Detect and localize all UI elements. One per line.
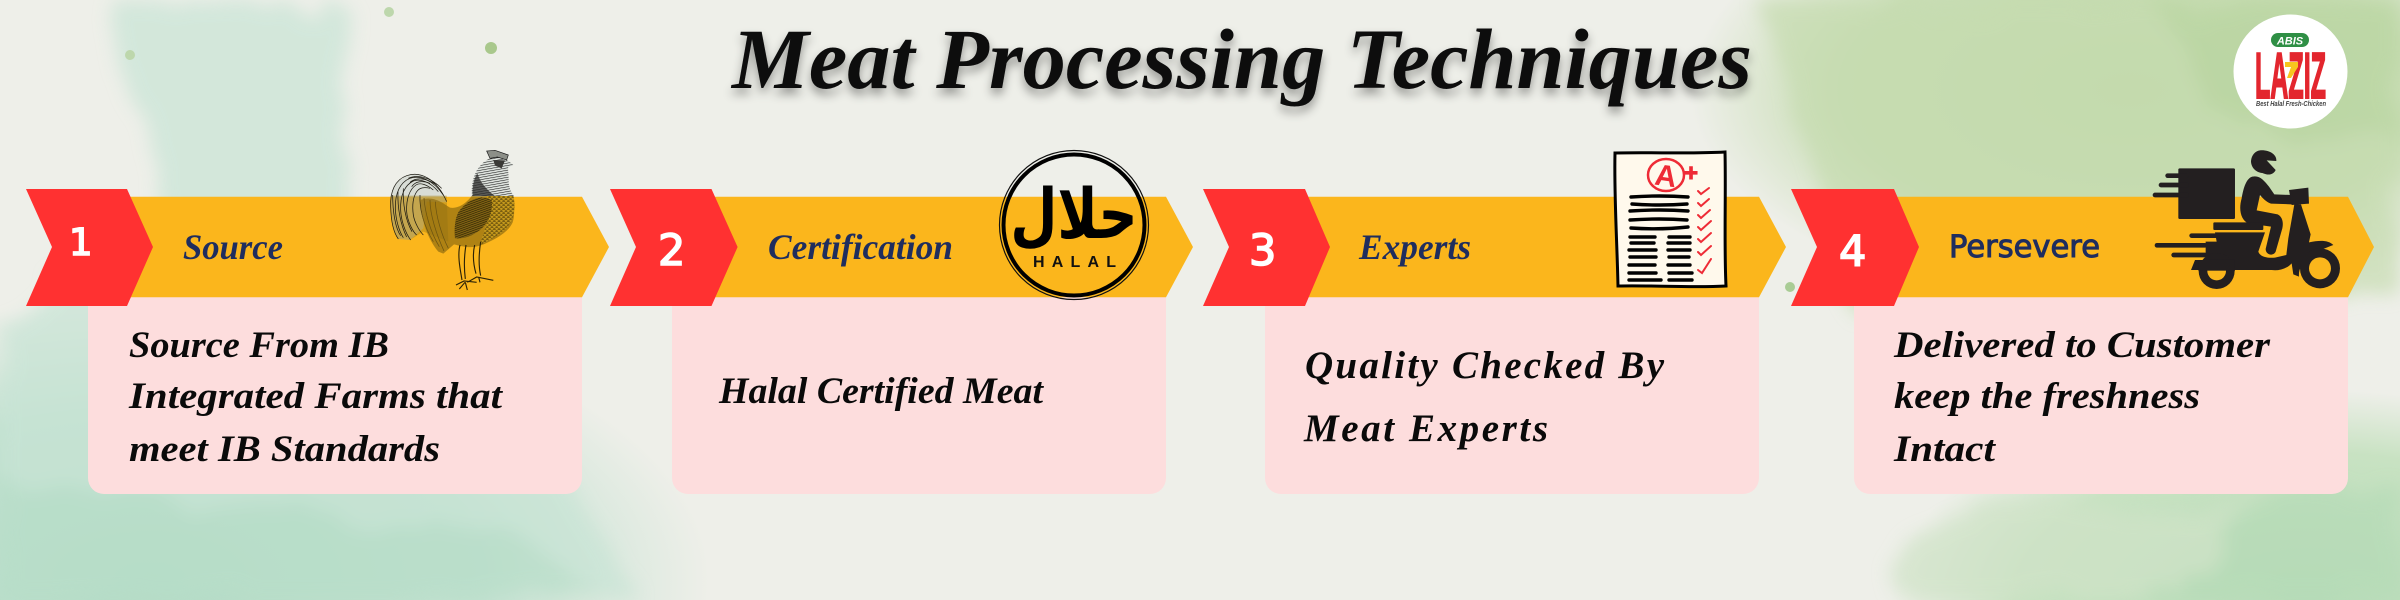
yellow arrow band 2 (711, 197, 1193, 297)
icon: delivery scooter (2155, 150, 2340, 289)
icon: halal seal: حلال (1010, 175, 1138, 255)
heading: Persevere: Persevere (1949, 229, 2100, 265)
heading: Certification: Certification (768, 227, 953, 267)
icon: halal seal: HALAL (1033, 254, 1116, 271)
number 4: 4 (1839, 227, 1866, 277)
title: Meat Processing Techniques (730, 11, 1752, 107)
description text 4 (1893, 325, 2271, 470)
yellow arrow band 3 (1305, 197, 1786, 297)
panel: step 4 persevere (1791, 150, 2374, 494)
description text 1: Integrated Farms that (128, 376, 504, 417)
description text 4: Intact (1893, 429, 1997, 470)
description text 1: Source From IB (129, 325, 389, 366)
description text 4: keep the freshness (1894, 376, 2200, 417)
icon: graded report (1615, 152, 1726, 287)
red number chevron 2 (610, 189, 738, 306)
description card 3 (1265, 297, 1759, 494)
yellow arrow band 1 (127, 197, 609, 297)
description text 1: meet IB Standards (129, 429, 440, 470)
description text 3 (1303, 344, 1665, 450)
description card 2 (672, 297, 1166, 494)
description text 2: Halal Certified Meat (718, 371, 1045, 412)
panel: step 2 certification (610, 150, 1193, 494)
panel: step 1 source (26, 150, 609, 494)
description card 4 (1854, 297, 2348, 494)
icon: graded report: A (1653, 159, 1679, 194)
heading: Experts: Experts (1358, 227, 1471, 267)
red number chevron 4 (1791, 189, 1919, 306)
number 1: 1 (69, 221, 93, 264)
icon: rooster (391, 150, 515, 290)
icon: halal seal (1000, 150, 1148, 300)
panel: step 3 experts (1203, 152, 1786, 494)
red number chevron 1 (26, 189, 153, 306)
description text 3: Meat Experts (1303, 407, 1548, 450)
number 2: 2 (658, 226, 685, 276)
logo: Abis Laziz: Best Halal Fresh-Chicken (2256, 99, 2326, 108)
description text 4: Delivered to Customer (1893, 325, 2271, 366)
heading: Source: Source (183, 227, 283, 267)
logo: Abis Laziz (2234, 14, 2348, 128)
description text 3: Quality Checked By (1305, 344, 1665, 387)
red number chevron 3 (1203, 189, 1330, 306)
description card 1 (88, 297, 582, 494)
description text 1 (128, 325, 504, 470)
icon: graded report: + (1684, 160, 1698, 187)
logo: Abis Laziz: ABIS (2276, 36, 2304, 48)
yellow arrow band 4 (1894, 197, 2374, 297)
number 3: 3 (1249, 226, 1276, 276)
